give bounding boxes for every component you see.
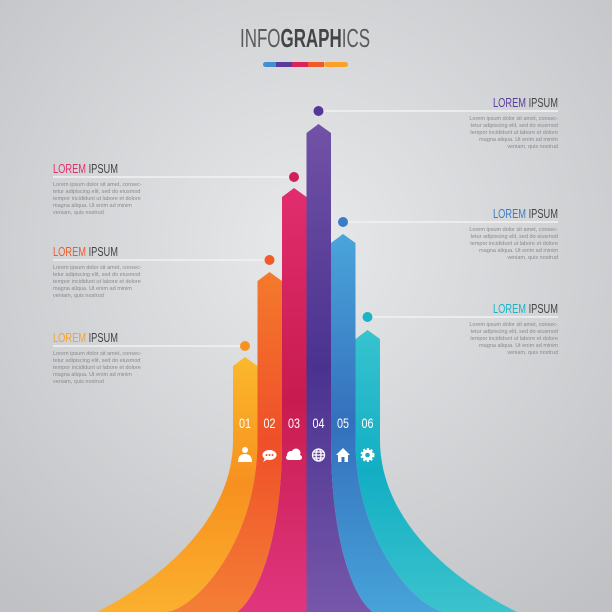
text block: left middle: tetur adipiscing elit, sed do eiusmod — [53, 272, 140, 278]
column numbers — [239, 415, 374, 431]
title: INFOGRAPHICS — [240, 23, 370, 53]
text block: right middle — [469, 206, 558, 261]
text block: right bottom: veniam, quis nostrud — [507, 350, 558, 356]
text block: right middle: tempor incididunt ut labore et dolore — [470, 241, 558, 247]
text block: left bottom: LOREM IPSUM — [53, 330, 118, 345]
text block: right middle: LOREM IPSUM — [493, 206, 558, 221]
text block: left middle: tempor incididunt ut labore et dolore — [53, 279, 141, 285]
title color bar — [263, 62, 348, 67]
icon: chat bubble — [262, 450, 276, 462]
text block: left top: tetur adipiscing elit, sed do eiusmod — [53, 189, 140, 195]
column 1 — [97, 357, 258, 612]
column numbers: 04 — [312, 415, 325, 431]
text block: right top: veniam, quis nostrud — [507, 144, 558, 150]
text block: right middle: magna aliqua. Ut enim ad minim — [479, 248, 558, 254]
text block: left bottom — [53, 330, 142, 385]
text block: right bottom: LOREM IPSUM — [493, 301, 558, 316]
icon: globe — [312, 449, 324, 461]
text block: right bottom: tetur adipiscing elit, sed do eiusmod — [471, 329, 558, 335]
text block: right middle: tetur adipiscing elit, sed do eiusmod — [471, 234, 558, 240]
text block: right middle: veniam, quis nostrud — [507, 255, 558, 261]
text block: right middle: Lorem ipsum dolor sit amet, consec- — [469, 227, 558, 233]
column 3 — [237, 188, 306, 612]
text block: left top: LOREM IPSUM — [53, 161, 118, 176]
text block: right top: tempor incididunt ut labore et dolore — [470, 130, 558, 136]
column 6 — [356, 330, 517, 612]
text block: right top: LOREM IPSUM — [493, 95, 558, 110]
column numbers: 02 — [264, 415, 276, 431]
column 5 — [331, 234, 447, 612]
text block: left bottom: Lorem ipsum dolor sit amet, consec- — [53, 351, 142, 357]
text block: right top: tetur adipiscing elit, sed do eiusmod — [471, 123, 558, 129]
text block: left top — [53, 161, 142, 216]
text block: left middle: Lorem ipsum dolor sit amet, consec- — [53, 265, 142, 271]
text block: right bottom: tempor incididunt ut labore et dolore — [470, 336, 558, 342]
text block: left top: magna aliqua. Ut enim ad minim — [53, 203, 132, 209]
leader lines and dots — [53, 106, 558, 351]
column numbers: 05 — [337, 415, 349, 431]
icon: person — [238, 447, 252, 462]
text block: right top: magna aliqua. Ut enim ad minim — [479, 137, 558, 143]
column numbers: 06 — [362, 415, 374, 431]
text block: left bottom: tempor incididunt ut labore et dolore — [53, 365, 141, 371]
text block: left bottom: veniam, quis nostrud — [53, 379, 104, 385]
column numbers: 03 — [288, 415, 300, 431]
text block: left top: Lorem ipsum dolor sit amet, consec- — [53, 182, 142, 188]
text block: left middle — [53, 244, 142, 299]
icon: gear — [362, 450, 373, 460]
icon: home — [336, 448, 350, 462]
text block: left middle: magna aliqua. Ut enim ad minim — [53, 286, 132, 292]
text block: left bottom: magna aliqua. Ut enim ad minim — [53, 372, 132, 378]
text block: right bottom: Lorem ipsum dolor sit amet, consec- — [469, 322, 558, 328]
column 2 — [165, 272, 282, 612]
icon: cloud — [286, 448, 302, 460]
text block: left middle: LOREM IPSUM — [53, 244, 118, 259]
text block: right bottom — [469, 301, 558, 356]
text block: left bottom: tetur adipiscing elit, sed do eiusmod — [53, 358, 140, 364]
column 4 — [306, 124, 373, 612]
text block: left middle: veniam, quis nostrud — [53, 293, 104, 299]
text block: right top: Lorem ipsum dolor sit amet, consec- — [469, 116, 558, 122]
text block: left top: tempor incididunt ut labore et dolore — [53, 196, 141, 202]
text block: right bottom: magna aliqua. Ut enim ad minim — [479, 343, 558, 349]
text block: right top — [469, 95, 558, 150]
column numbers: 01 — [239, 415, 251, 431]
text block: left top: veniam, quis nostrud — [53, 210, 104, 216]
